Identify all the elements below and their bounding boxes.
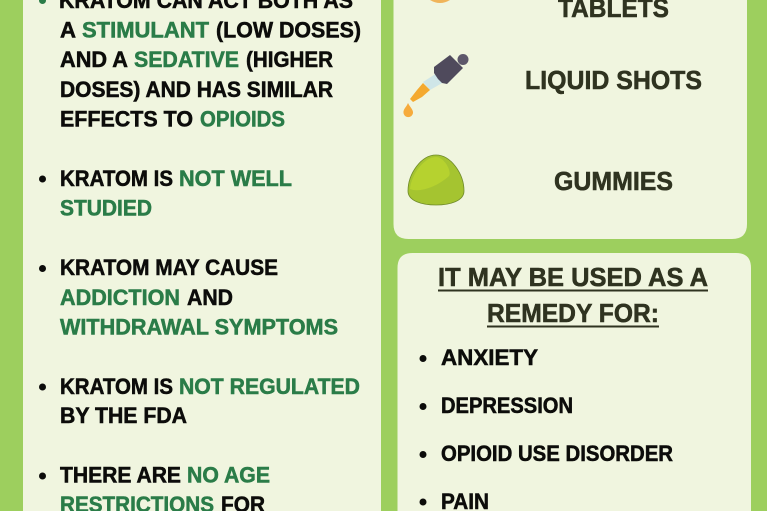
list item: anxiety: ANXIETY — [441, 345, 538, 370]
fact: addiction and withdrawal — [39, 255, 338, 340]
icon: liquid dropper — [403, 54, 468, 117]
fact: stimulant and sedative: (LOW DOSES) — [216, 18, 361, 42]
fact: no age restrictions — [39, 463, 270, 511]
fact: addiction and withdrawal: KRATOM MAY CAUSE — [60, 255, 278, 280]
list item: pain — [420, 489, 489, 511]
fact: stimulant and sedative: A — [60, 18, 76, 42]
fact: no age restrictions: THERE ARE — [60, 463, 181, 488]
heading: it may be used as a remedy for: REMEDY FOR: — [487, 298, 659, 328]
fact: not regulated — [39, 374, 360, 428]
fact: not regulated: NOT REGULATED — [179, 374, 360, 399]
list item: opioid use disorder: OPIOID USE DISORDER — [441, 441, 673, 466]
fact: stimulant and sedative — [39, 0, 361, 132]
fact: not well studied: KRATOM IS — [60, 166, 173, 191]
fact: addiction and withdrawal: ADDICTION — [60, 285, 180, 310]
icon: tablet — [430, 0, 450, 3]
fact: stimulant and sedative: DOSES) AND HAS SIMILAR — [60, 77, 333, 102]
fact: stimulant and sedative: OPIOIDS — [200, 107, 285, 132]
fact: stimulant and sedative: SEDATIVE — [134, 47, 239, 72]
fact: not well studied — [39, 166, 292, 221]
fact: not well studied: STUDIED — [60, 196, 152, 221]
heading: it may be used as a remedy for — [438, 262, 708, 328]
fact: stimulant and sedative: AND A — [60, 47, 128, 72]
fact: addiction and withdrawal: AND — [187, 285, 233, 310]
label: gummies: GUMMIES — [554, 166, 673, 196]
list item: depression: DEPRESSION — [441, 393, 573, 418]
panel: remedy uses — [398, 253, 751, 511]
fact: addiction and withdrawal: WITHDRAWAL SYMPTOMS — [60, 315, 338, 340]
panel: product forms — [394, 0, 747, 239]
fact: stimulant and sedative: (HIGHER — [246, 47, 333, 72]
panel: kratom facts — [23, 0, 381, 511]
fact: not regulated: KRATOM IS — [60, 374, 173, 399]
fact: not regulated: BY THE FDA — [60, 403, 187, 428]
heading: it may be used as a remedy for: IT MAY BE USED AS A — [438, 262, 708, 292]
fact: stimulant and sedative: STIMULANT — [82, 18, 209, 42]
icon: gummy — [408, 155, 464, 205]
fact: no age restrictions: NO AGE — [187, 463, 270, 488]
fact: stimulant and sedative: EFFECTS TO — [60, 107, 193, 132]
fact: not well studied: NOT WELL — [179, 166, 292, 191]
label: liquid shots: LIQUID SHOTS — [525, 65, 702, 95]
